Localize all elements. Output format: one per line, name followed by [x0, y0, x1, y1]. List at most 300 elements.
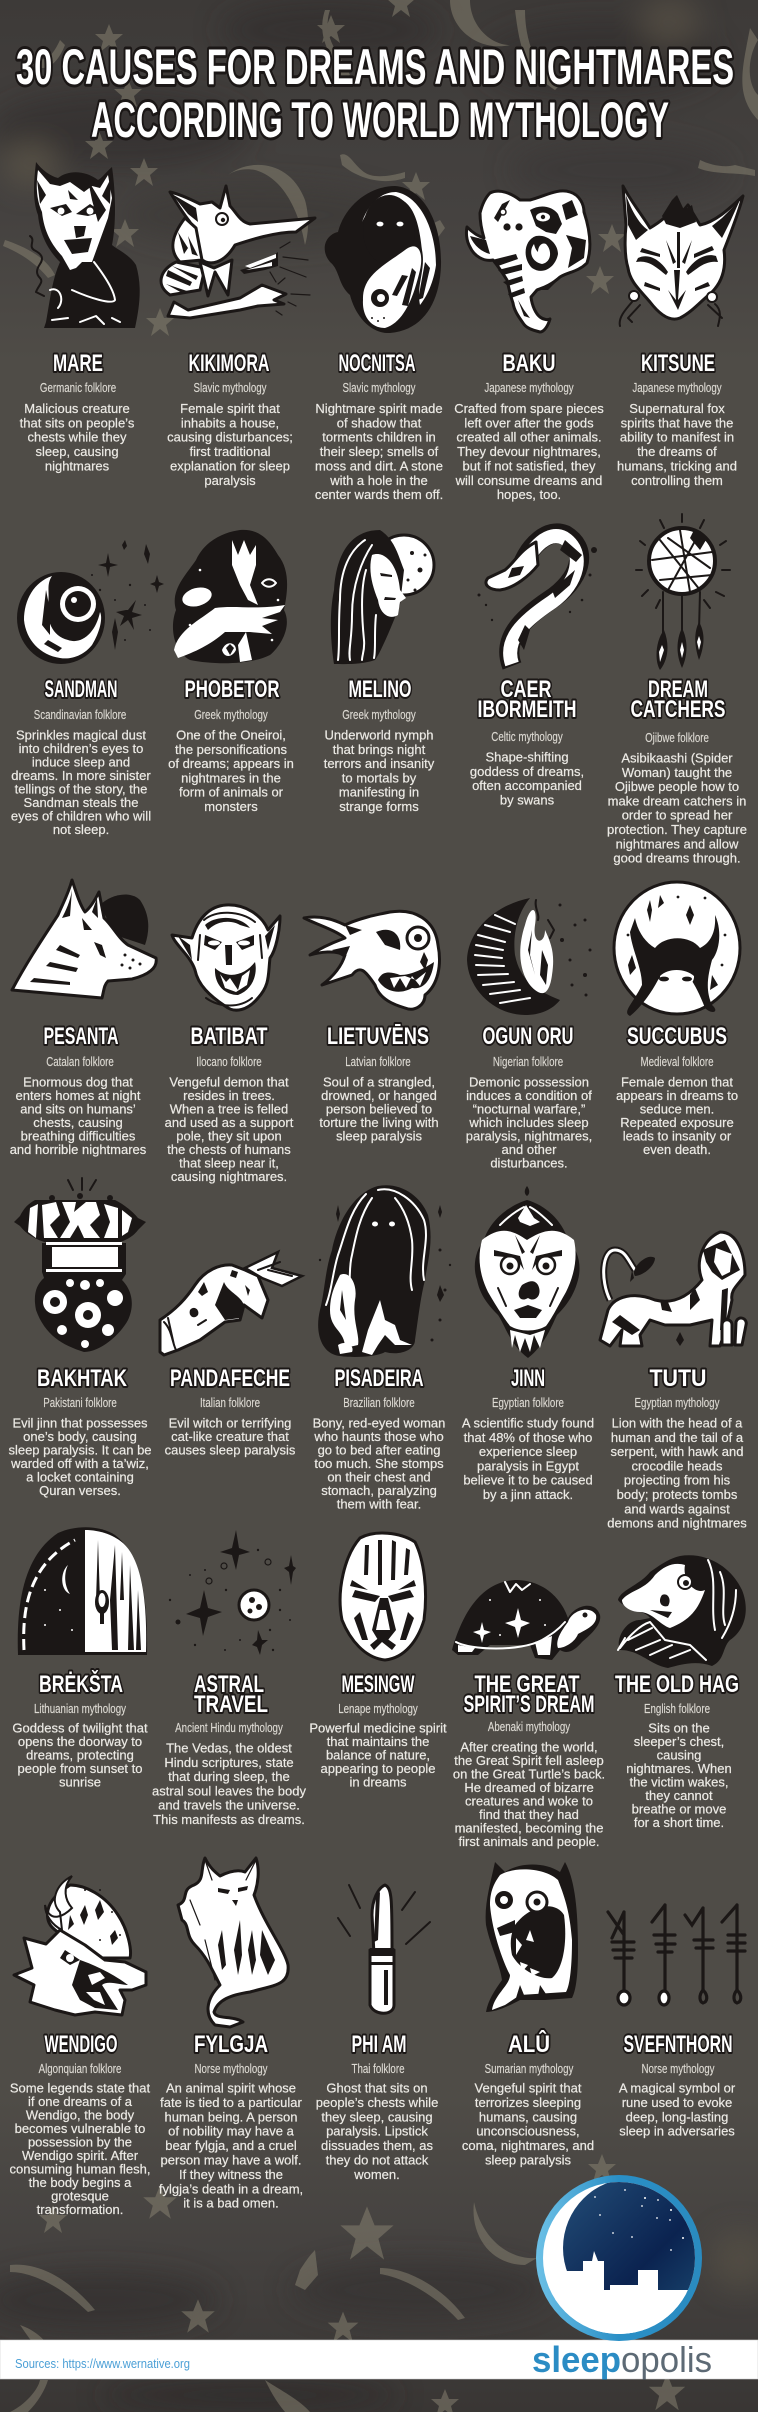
description: hopes, too. [497, 487, 561, 502]
origin: Lithuanian mythology [34, 1703, 126, 1716]
description: center wards them off. [315, 487, 443, 502]
heading: PHI AM [352, 2031, 406, 2058]
panel: Succubus [614, 882, 740, 1157]
panel: Brekšta [12, 1527, 148, 1790]
description: who haunts those who [313, 1429, 444, 1444]
logo: sleepopolis [532, 2175, 712, 2380]
description: first animals and people. [459, 1834, 599, 1849]
panel: Jinn [462, 1186, 594, 1502]
icon: dream catcher [636, 514, 730, 670]
icon: The Old Hag [618, 1555, 746, 1668]
description: induces a condition of [466, 1088, 592, 1103]
origin: Japanese mythology [484, 382, 574, 395]
icon: Sandman eye and stars [17, 540, 164, 664]
description: the chests of humans [167, 1142, 291, 1157]
description: enters homes at night [15, 1088, 141, 1103]
description: Nightmare spirit made [315, 401, 443, 416]
description: causing [657, 1748, 701, 1762]
heading: ASTRAL [194, 1671, 264, 1698]
description: their sleep; smells of [320, 444, 439, 459]
description: sleep in adversaries [619, 2124, 735, 2139]
description: strange forms [339, 799, 419, 814]
heading: BAKU [502, 350, 556, 377]
heading: PANDAFECHE [170, 1365, 290, 1392]
description: Powerful medicine spirit [309, 1720, 447, 1736]
panel: Mare [20, 162, 140, 473]
description: too much. She stomps [314, 1456, 444, 1471]
description: fate is tied to a particular [160, 2095, 302, 2110]
description: paralysis. Lipstick [326, 2124, 428, 2139]
icon: Mesingw mask [340, 1533, 426, 1660]
description: Woman) taught the [622, 765, 732, 780]
heading: PISADEIRA [334, 1365, 424, 1392]
icon: Bakhtak talisman [14, 1178, 146, 1352]
panel: Sandman [11, 540, 164, 837]
description: transformation. [37, 2202, 123, 2217]
description: the dreams of [637, 444, 717, 459]
description: moss and dirt. A stone [315, 458, 443, 473]
description: Vengeful demon that [169, 1074, 289, 1090]
icon: Baku elephant head [466, 191, 590, 332]
description: humans, causing [479, 2109, 577, 2124]
panel: Kitsune [617, 186, 743, 488]
origin: Algonquian folklore [39, 2063, 121, 2076]
origin: Egyptian mythology [635, 1397, 720, 1410]
heading: MESINGW [342, 1671, 415, 1698]
description: will consume dreams and [455, 473, 602, 488]
panel: Pandafeche [160, 1252, 302, 1458]
description: A magical symbol or [619, 2080, 736, 2096]
description: “nocturnal warfare,” [473, 1102, 585, 1116]
description: Bony, red-eyed woman [313, 1416, 445, 1430]
description: Demonic possession [469, 1074, 589, 1090]
icon: Mare goblin [30, 162, 140, 328]
description: torture the living with [319, 1115, 439, 1130]
description: bear fylgja, and a cruel [165, 2138, 297, 2153]
description: sleep, causing [35, 444, 119, 459]
description: dreams, protecting [26, 1748, 134, 1762]
description: nightmares in the [181, 770, 281, 785]
description: Goddess of twilight that [12, 1720, 148, 1736]
icon: Ogun Oru crescent and flames [467, 898, 592, 1015]
description: After creating the world, [460, 1740, 598, 1754]
description: make dream catchers in [608, 793, 746, 808]
description: people’s chests while [316, 2095, 438, 2110]
description: that during sleep, the [168, 1769, 290, 1784]
description: Malicious creature [24, 401, 130, 416]
description: crocodile heads [631, 1458, 723, 1473]
description: of dreams; appears in [168, 756, 294, 771]
panel: Svefnthorn [608, 1905, 745, 2139]
description: breathe or move [632, 1802, 726, 1816]
icon: Pisadeira crouching figure [318, 1185, 451, 1357]
description: if one dreams of a [28, 2094, 133, 2109]
description: protection. They capture [607, 822, 747, 837]
description: Ghost that sits on [326, 2080, 428, 2096]
description: pole, they sit upon [176, 1128, 282, 1144]
heading: KITSUNE [641, 350, 715, 377]
description: manifested, becoming the [455, 1820, 603, 1836]
description: Enormous dog that [23, 1074, 133, 1090]
origin: Slavic mythology [193, 382, 267, 395]
description: astral soul leaves the body [152, 1783, 306, 1798]
description: into children’s eyes to [19, 741, 143, 756]
description: terrors and insanity [324, 756, 435, 771]
panel: Batibat [165, 905, 294, 1184]
description: Female spirit that [180, 401, 280, 416]
icon: Wendigo [14, 1876, 146, 2015]
icon: Caer swan [478, 533, 597, 666]
description: terrorizes sleeping [475, 2095, 581, 2110]
heading: MELINO [348, 676, 412, 703]
description: If they witness the [179, 2167, 283, 2182]
description: that sits on people’s [20, 415, 135, 430]
heading: FYLGJA [194, 2031, 268, 2058]
description: Underworld nymph [324, 728, 434, 742]
description: on their chest and [327, 1470, 431, 1484]
description: the body begins a [29, 2175, 132, 2190]
panel: Wendigo [10, 1876, 150, 2217]
description: order to spread her [622, 808, 733, 823]
origin: Latvian folklore [345, 1056, 411, 1069]
description: Ojibwe people how to [615, 779, 739, 794]
panel: Pesanta [10, 880, 156, 1157]
description: left over after the gods [464, 415, 594, 430]
description: Some legends state that [10, 2080, 150, 2096]
origin: Scandinavian folklore [34, 709, 126, 722]
description: stomach, paralyzing [321, 1483, 437, 1498]
description: one’s body, causing [23, 1429, 137, 1444]
icon: Svefnthorn runes [608, 1905, 745, 2005]
description: warded off with a ta’wiz, [10, 1456, 149, 1471]
description: and horrible nightmares [10, 1142, 147, 1157]
description: Wendigo spirit. After [22, 2148, 139, 2163]
description: possession by the [28, 2134, 132, 2150]
description: by a jinn attack. [483, 1487, 573, 1502]
heading: WENDIGO [44, 2031, 118, 2058]
origin: Egyptian folklore [492, 1397, 564, 1410]
description: sleep paralysis [336, 1128, 422, 1144]
icon: Pesanta dog head [12, 880, 156, 998]
heading: CAER [500, 676, 552, 703]
description: Sprinkles magical dust [16, 728, 146, 742]
description: disturbances. [490, 1156, 568, 1170]
description: body; protects tombs [617, 1487, 738, 1502]
description: leads to insanity or [623, 1128, 732, 1144]
description: Repeated exposure [620, 1115, 734, 1130]
description: sleep paralysis [485, 2152, 571, 2168]
heading: PESANTA [44, 1023, 118, 1050]
origin: Norse mythology [194, 2063, 268, 2076]
description: appearing to people [321, 1761, 435, 1776]
description: nightmares [45, 458, 110, 473]
description: of nobility may have a [168, 2124, 295, 2139]
description: on the Great Turtle’s back. [453, 1766, 605, 1782]
icon: Brekšta door [18, 1527, 147, 1655]
panel: Nocnitsa [315, 186, 443, 502]
icon: lipstick [338, 1885, 430, 2013]
description: a locket containing [26, 1470, 134, 1484]
description: cat-like creature that [171, 1429, 289, 1444]
description: and wards against [624, 1501, 730, 1516]
heading: TUTU [650, 1365, 706, 1392]
heading: KIKIMORA [188, 350, 270, 377]
description: often accompanied [472, 778, 582, 793]
description: spirits that have the [621, 415, 733, 430]
description: seduce men. [640, 1102, 714, 1116]
description: dreams. In more sinister [11, 768, 151, 783]
origin: Ilocano folklore [196, 1056, 262, 1069]
description: of shadow that [337, 415, 422, 430]
description: find that they had [479, 1807, 579, 1822]
description: unconsciousness, [476, 2124, 580, 2139]
description: chests, causing [33, 1115, 123, 1130]
description: person believed to [326, 1102, 432, 1116]
description: even death. [643, 1142, 711, 1157]
icon: Alû monster [486, 1862, 578, 2012]
description: tellings of the story, the [15, 782, 147, 796]
description: go to bed after eating [318, 1442, 440, 1458]
panel: Mesingw [309, 1533, 447, 1790]
description: by swans [500, 792, 555, 807]
description: the personifications [175, 742, 288, 757]
description: humans, tricking and [617, 458, 737, 473]
description: This manifests as dreams. [153, 1812, 305, 1827]
description: women. [353, 2167, 400, 2182]
description: serpent, with hawk and [611, 1444, 743, 1459]
description: Hindu scriptures, state [164, 1755, 294, 1770]
origin: English folklore [644, 1703, 710, 1716]
origin: Norse mythology [641, 2063, 715, 2076]
description: rune used to evoke [622, 2095, 732, 2110]
description: deep, long-lasting [626, 2109, 728, 2124]
description: dissuades them, as [321, 2138, 433, 2153]
footer band [0, 2340, 758, 2379]
description: they sleep, causing [321, 2109, 433, 2124]
description: that maintains the [327, 1734, 429, 1749]
description: ability to manifest in [620, 430, 734, 445]
panel: Phobetor [168, 530, 294, 814]
description: paralysis in Egypt [477, 1458, 579, 1473]
icon: Fylgja spirit animal [178, 1858, 288, 2027]
description: eyes of children who will [11, 808, 151, 824]
origin: Abenaki mythology [488, 1721, 570, 1734]
panel: Ogun Oru [466, 898, 592, 1170]
description: sleeper’s chest, [634, 1734, 724, 1749]
description: Sandman steals the [24, 795, 138, 810]
origin: Italian folklore [200, 1397, 260, 1410]
description: Asibikaashi (Spider [621, 750, 733, 766]
description: people from sunset to [17, 1761, 143, 1776]
description: creatures and woke to [465, 1794, 593, 1808]
description: The Vedas, the oldest [166, 1740, 292, 1756]
origin: Medieval folklore [640, 1056, 714, 1069]
panel: Dream Catchers [607, 514, 747, 866]
heading: IBORMEITH [478, 696, 576, 723]
description: They devour nightmares, [457, 444, 601, 459]
description: Female demon that [621, 1074, 733, 1090]
description: coma, nightmares, and [462, 2138, 594, 2153]
description: A scientific study found [462, 1416, 594, 1430]
description: drowned, or hanged [321, 1088, 437, 1103]
description: causing disturbances; [167, 430, 293, 445]
description: Quran verses. [39, 1483, 121, 1498]
description: the victim wakes, [630, 1774, 728, 1790]
origin: Celtic mythology [491, 731, 563, 744]
description: Evil jinn that possesses [12, 1416, 148, 1430]
description: balance of nature, [326, 1748, 430, 1762]
origin: Germanic folklore [40, 382, 116, 395]
heading: DREAM [648, 676, 708, 703]
description: created all other animals. [456, 430, 602, 445]
description: first traditional [190, 444, 271, 459]
description: form of animals or [179, 785, 284, 800]
description: but if not satisfied, they [463, 458, 596, 473]
description: that sleep near it, [179, 1156, 279, 1170]
description: appears in dreams to [616, 1088, 738, 1103]
description: Supernatural fox [629, 401, 725, 416]
description: projecting from his [624, 1473, 731, 1488]
description: goddess of dreams, [470, 764, 584, 779]
description: that brings night [333, 742, 426, 757]
description: Sits on the [648, 1720, 710, 1736]
description: chests while they [28, 430, 127, 445]
panel: Fylgja [159, 1858, 303, 2211]
heading: SANDMAN [44, 676, 118, 703]
icon: Lietuvens flaming skull [304, 911, 439, 1009]
description: nightmares and allow [616, 836, 739, 851]
panel: Bakhtak [8, 1178, 152, 1498]
panel: Alû [462, 1862, 594, 2168]
panel: Lietuvens [304, 911, 439, 1144]
description: sunrise [59, 1774, 101, 1790]
description: paralysis [204, 473, 256, 488]
heading: BRĖKŠTA [39, 1670, 123, 1698]
origin: Lenape mythology [338, 1703, 418, 1716]
description: One of the Oneiroi, [176, 728, 286, 742]
description: experience sleep [479, 1444, 577, 1459]
description: Crafted from spare pieces [454, 401, 604, 416]
origin: Thai folklore [351, 2063, 405, 2076]
origin: Japanese mythology [632, 382, 722, 395]
description: explanation for sleep [170, 458, 290, 473]
description: causes sleep paralysis [165, 1442, 296, 1458]
description: demons and nightmares [607, 1516, 747, 1531]
description: grotesque [51, 2188, 109, 2204]
description: they do not attack [326, 2152, 429, 2168]
heading: JINN [511, 1365, 545, 1392]
description: becomes vulnerable to [15, 2121, 145, 2136]
description: Shape-shifting [485, 750, 569, 764]
description: human and the tail of a [611, 1430, 744, 1445]
description: it is a bad omen. [183, 2196, 279, 2211]
heading: MARE [53, 350, 103, 377]
panel: Phi Am [316, 1885, 438, 2182]
panel: Melino [324, 530, 435, 814]
description: opens the doorway to [18, 1734, 142, 1749]
origin: Brazilian folklore [343, 1397, 415, 1410]
description: nightmares. When [626, 1761, 732, 1776]
description: in dreams [349, 1774, 407, 1790]
description: controlling them [631, 473, 723, 488]
description: that 48% of those who [464, 1430, 592, 1445]
sources: Sources: https://www.wernative.org [15, 2357, 190, 2371]
panel: Kikimora [161, 186, 315, 488]
description: paralysis, nightmares, [466, 1128, 592, 1144]
description: causing nightmares. [171, 1169, 287, 1184]
heading: BAKHTAK [37, 1365, 128, 1392]
heading: OGUN ORU [482, 1023, 574, 1050]
description: induce sleep and [32, 754, 130, 770]
origin: Sumarian mythology [485, 2063, 574, 2076]
origin: Greek mythology [342, 709, 416, 722]
panel: Tutu [600, 1232, 747, 1531]
description: Wendigo, the body [26, 2108, 135, 2122]
description: and used as a support [165, 1115, 294, 1130]
description: consuming human flesh, [10, 2162, 150, 2176]
icon: Kikimora [161, 186, 315, 318]
origin: Pakistani folklore [43, 1397, 117, 1410]
icon: Phobetor dark form with hand [173, 530, 287, 663]
origin: Nigerian folklore [493, 1056, 563, 1069]
description: Soul of a strangled, [323, 1074, 435, 1090]
icon: Nocnitsa hooded spirit and stone [325, 186, 441, 333]
description: person may have a wolf. [161, 2152, 301, 2168]
description: monsters [204, 799, 258, 814]
icon: Kitsune fox mask [620, 186, 743, 326]
icon: Great Turtle [452, 1580, 600, 1660]
description: He dreamed of bizarre [464, 1780, 594, 1795]
description: believe it to be caused [463, 1473, 593, 1488]
description: the Great Spirit fell asleep [454, 1753, 604, 1768]
heading: TRAVEL [194, 1691, 268, 1718]
heading: NOCNITSA [338, 350, 416, 377]
heading: PHOBETOR [184, 676, 280, 703]
icon: Melino moon and face [331, 530, 434, 664]
description: torments children in [322, 430, 436, 445]
description: to mortals by [342, 770, 417, 785]
description: they cannot [645, 1788, 713, 1803]
icon: Tutu sphinx [600, 1232, 746, 1346]
description: which includes sleep [468, 1115, 589, 1130]
origin: Ojibwe folklore [645, 732, 709, 745]
icon: Astral stars and moon [169, 1530, 296, 1655]
icon: Jinn face [475, 1186, 580, 1358]
title [16, 39, 734, 148]
origin: Ancient Hindu mythology [175, 1722, 283, 1735]
panel: The Old Hag [615, 1555, 746, 1830]
description: with a hole in the [329, 473, 428, 488]
description: manifesting in [339, 785, 419, 800]
heading: ALÛ [508, 2030, 550, 2058]
heading: THE GREAT [474, 1671, 580, 1698]
description: inhabits a house, [181, 415, 279, 430]
description: Evil witch or terrifying [169, 1416, 291, 1430]
panel: Astral Travel [152, 1530, 306, 1827]
description: not sleep. [53, 822, 109, 837]
description: resides in trees. [183, 1088, 275, 1103]
origin: Greek mythology [194, 709, 268, 722]
description: them with fear. [337, 1496, 421, 1512]
description: fylgja’s death in a dream, [159, 2181, 303, 2196]
description: human being. A person [164, 2109, 298, 2124]
description: When a tree is felled [170, 1102, 288, 1116]
heading: SPIRIT’S DREAM [464, 1691, 594, 1718]
origin: Slavic mythology [342, 382, 416, 395]
panel: Pisadeira [313, 1185, 451, 1512]
panel: Baku [454, 191, 604, 502]
icon: Batibat demon head [172, 905, 280, 1010]
